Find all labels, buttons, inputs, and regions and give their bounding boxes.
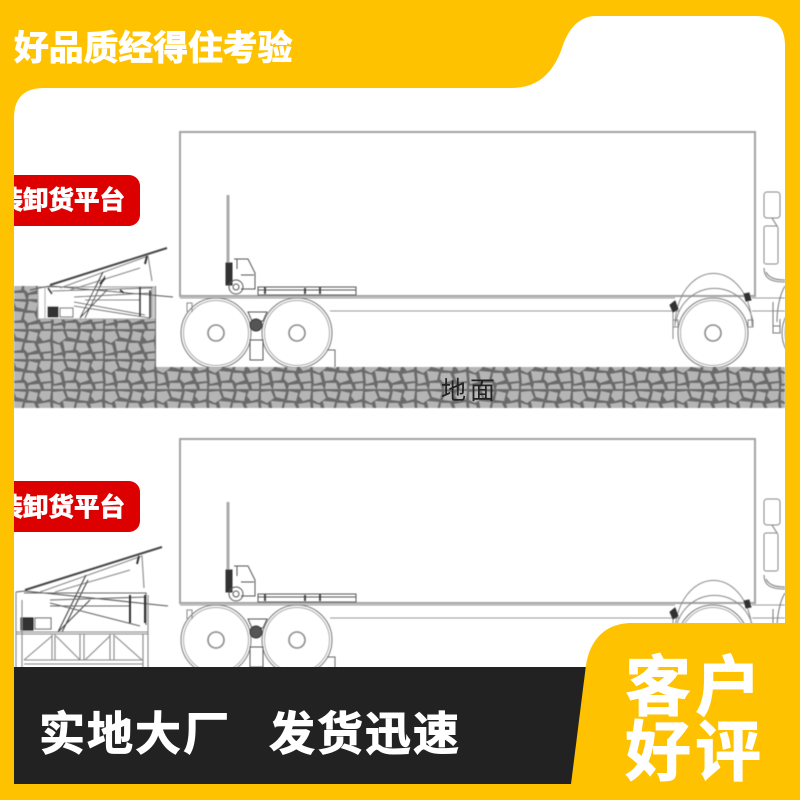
title: 好品质经得住考验 <box>14 29 293 68</box>
bottom dark banner <box>14 667 590 784</box>
ground and dock pit <box>14 286 785 408</box>
panel: scene one, truck at ground level <box>0 132 800 408</box>
banner text right: 发货迅速 <box>269 708 461 760</box>
banner text left: 实地大厂 <box>39 708 231 760</box>
truck <box>180 132 800 368</box>
ground label: 地面 <box>441 377 495 405</box>
review badge <box>569 623 800 800</box>
red label: 装卸货平台 <box>0 493 125 522</box>
badge text line one: 客户 <box>625 650 765 724</box>
red label: 装卸货平台 <box>0 186 125 215</box>
red label <box>0 175 140 226</box>
scaffold truss <box>16 592 148 668</box>
dock leveler on steel scaffold <box>16 547 168 668</box>
badge text line two: 好评 <box>625 715 765 789</box>
red label <box>0 481 140 532</box>
truck <box>180 439 800 675</box>
dock leveler, lowered pit <box>30 248 173 319</box>
panel: scene two, truck with raised dock <box>0 439 800 675</box>
